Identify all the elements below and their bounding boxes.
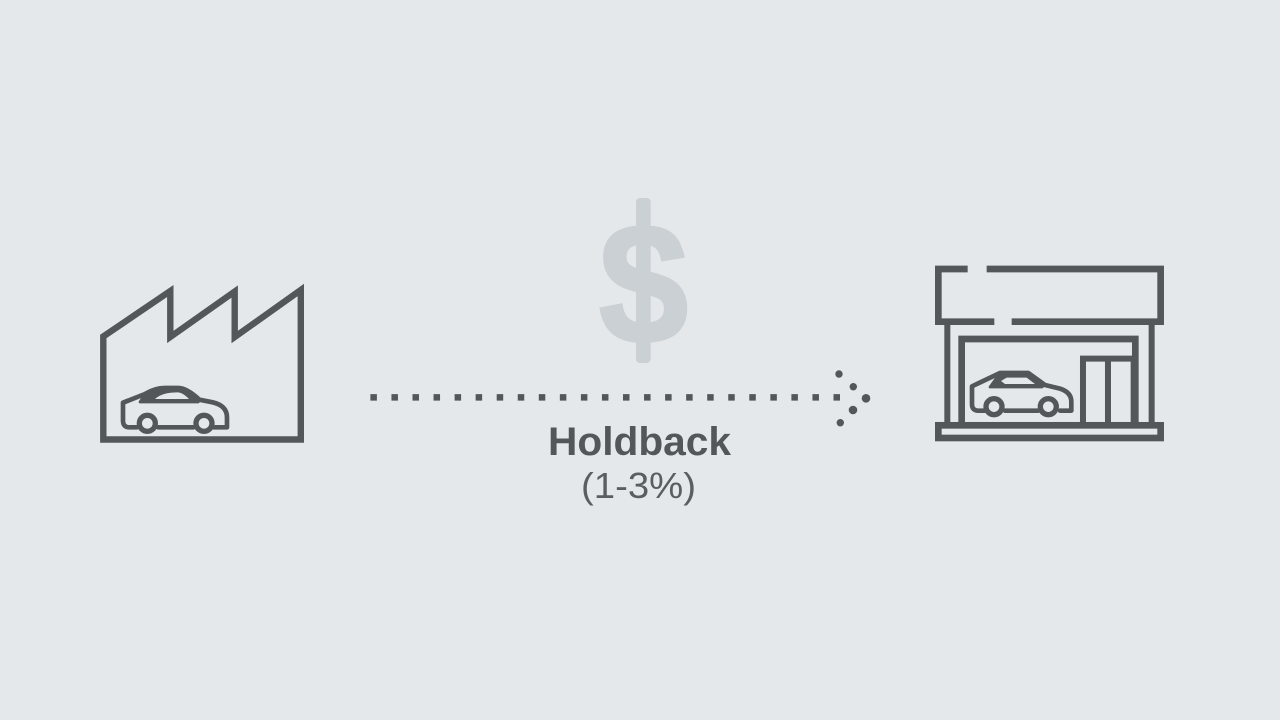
icon: car inside factory (123, 387, 227, 431)
label: Holdback: Holdback (548, 420, 732, 464)
label: percentage range: (1-3%) (581, 465, 696, 506)
icon: car dealership (938, 269, 1161, 438)
icon: dollar sign: $ (599, 189, 688, 380)
icon: factory with car (103, 290, 301, 440)
icon: car inside dealership (972, 373, 1071, 415)
arrow: dotted arrow from factory to dealership (370, 370, 870, 426)
